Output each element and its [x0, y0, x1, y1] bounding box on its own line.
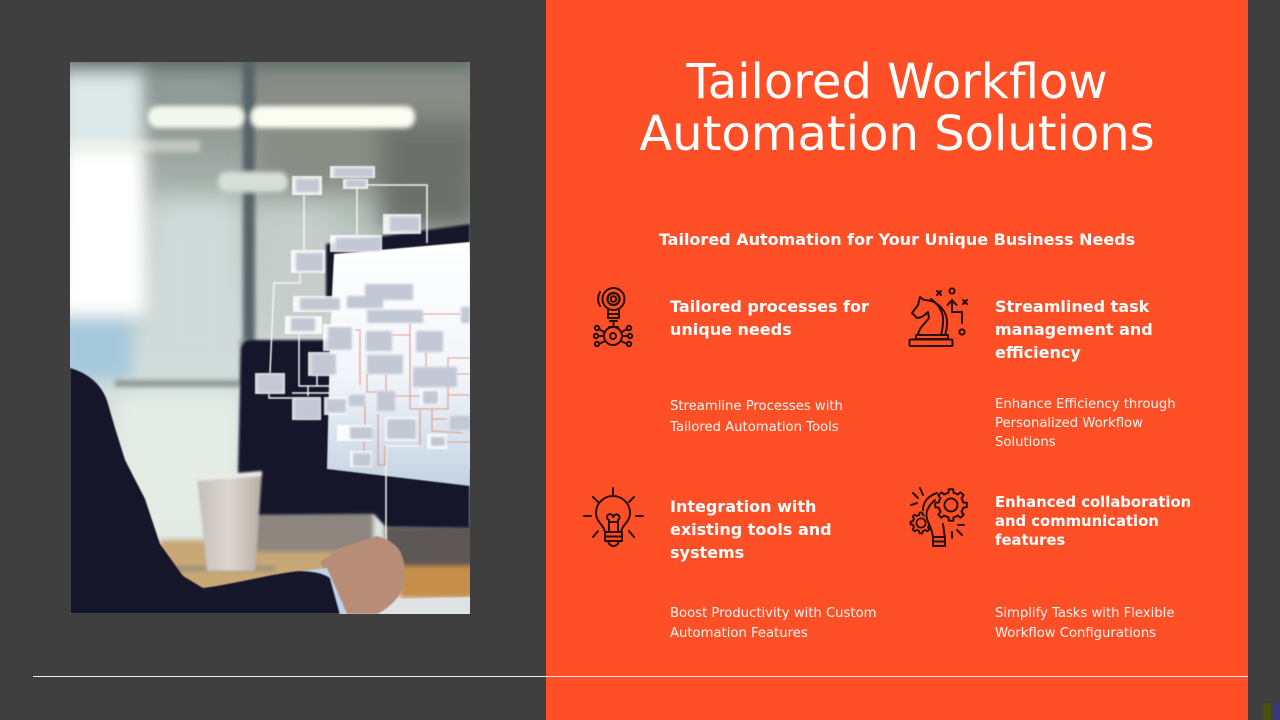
corner marks [1263, 703, 1280, 720]
heading: integration [670, 497, 832, 562]
background blur [148, 68, 470, 330]
screen [327, 242, 470, 486]
heading: tailored processes: Tailored processes for [670, 297, 869, 316]
heading: integration: Integration with [670, 497, 816, 516]
heading: tailored processes [670, 297, 869, 339]
heading: enhanced collaboration: features [995, 532, 1065, 549]
description: tailored processes [670, 399, 843, 435]
subtitle: Tailored Automation for Your Unique Business Needs [659, 230, 1135, 249]
photo: office worker with workflow diagram on screen [70, 62, 470, 614]
description: enhanced collaboration: Simplify Tasks with Flexible [995, 606, 1174, 621]
description: integration: Automation Features [670, 626, 808, 641]
description: streamlined task management: Personalized Workflow [995, 416, 1143, 431]
heading: tailored processes: unique needs [670, 320, 792, 339]
desk [160, 512, 475, 598]
heading: integration: systems [670, 543, 744, 562]
title [639, 54, 1155, 162]
heading: enhanced collaboration: Enhanced collaboration [995, 494, 1191, 511]
heading: enhanced collaboration [995, 494, 1191, 549]
title: Automation Solutions [639, 106, 1155, 162]
workflow boxes [255, 166, 447, 467]
workflow lines white [269, 185, 427, 541]
icon: bulb with gear and circuit [592, 287, 634, 348]
heading: streamlined task management [995, 297, 1153, 362]
forearm, shoulder and hand [70, 368, 470, 614]
heading: streamlined task management: management and [995, 320, 1153, 339]
cup [197, 471, 262, 571]
icon: chess knight strategy [908, 287, 968, 347]
description: integration [670, 606, 876, 641]
description: integration: Boost Productivity with Custom [670, 606, 876, 621]
workflow lines red [355, 314, 470, 465]
heading: streamlined task management: Streamlined task [995, 297, 1149, 316]
description: tailored processes: Streamline Processes with [670, 399, 843, 414]
heading: streamlined task management: efficiency [995, 343, 1081, 362]
icon: head bulb with gears [910, 487, 968, 547]
heading: integration: existing tools and [670, 520, 832, 539]
description: streamlined task management: Solutions [995, 435, 1056, 450]
description: enhanced collaboration: Workflow Configurations [995, 626, 1156, 641]
description: tailored processes: Tailored Automation Tools [670, 420, 839, 435]
heading: enhanced collaboration: and communication [995, 513, 1159, 530]
title: Tailored Workflow [686, 54, 1108, 110]
horizontal rule [33, 676, 1248, 677]
monitor [237, 224, 470, 528]
panel: orange content panel [546, 0, 1248, 720]
description: streamlined task management: Enhance Efficiency through [995, 397, 1176, 412]
description: streamlined task management [995, 397, 1176, 450]
description: enhanced collaboration [995, 606, 1174, 641]
icon: light bulb [583, 487, 644, 547]
